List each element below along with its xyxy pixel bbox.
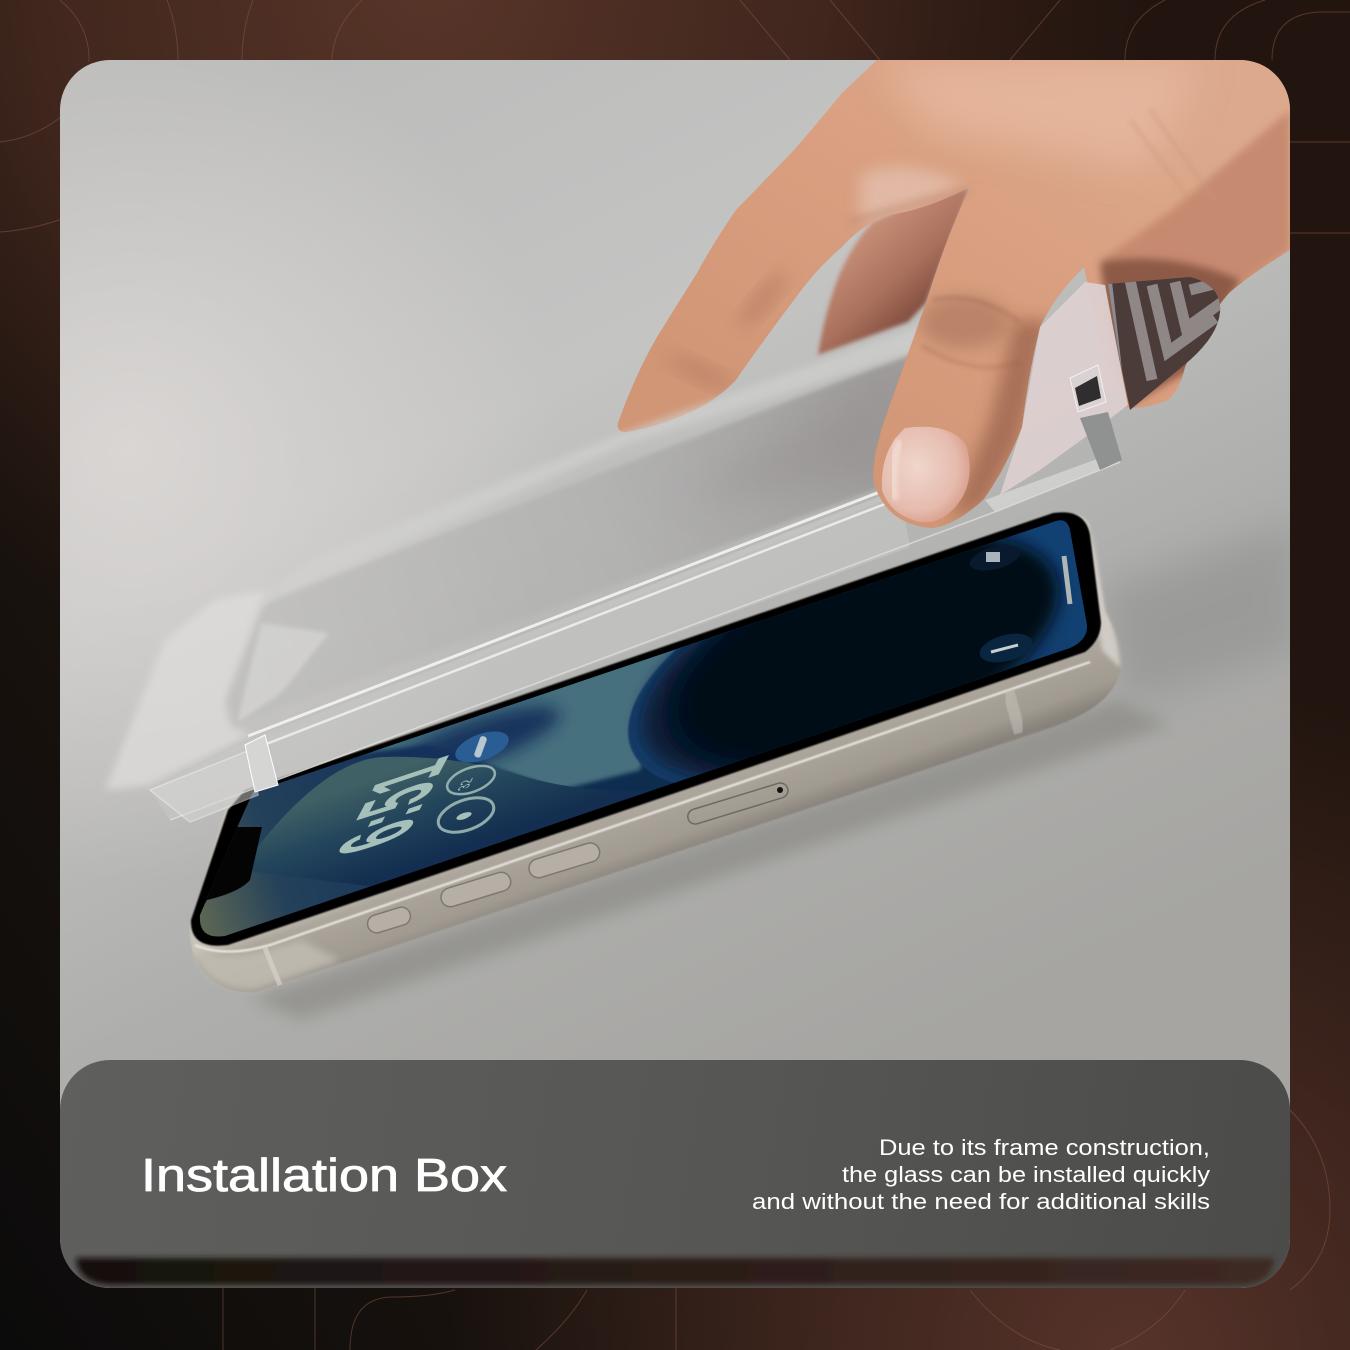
heading: Installation Box: [141, 1149, 507, 1201]
phone: [190, 486, 1120, 992]
description text: [752, 1135, 1210, 1214]
right clip: [1080, 412, 1122, 470]
caption panel: [60, 1060, 1290, 1288]
widget ring top: 32: [454, 776, 478, 793]
left lower corner: [150, 750, 258, 822]
inner triangle tab: [237, 623, 329, 723]
blue shade near pill: [396, 698, 566, 767]
back middle finger: [818, 187, 970, 355]
dark ellipse: [627, 543, 1020, 784]
notch: [204, 827, 262, 904]
metal left highlight: [195, 940, 340, 990]
metal highlight: [195, 662, 1090, 952]
back rail: [454, 323, 919, 514]
glass pane: [238, 354, 908, 680]
light glow: [60, 105, 409, 756]
description text: Due to its frame construction,: [879, 1135, 1210, 1160]
right block: [1000, 282, 1128, 495]
frame lower face: [242, 501, 910, 793]
hand: [618, 60, 1290, 528]
widget ring bottom: [436, 796, 496, 834]
camera button: [970, 546, 1020, 570]
left clip: [245, 735, 278, 792]
description text: the glass can be installed quickly: [842, 1162, 1210, 1187]
left tab: [105, 590, 265, 790]
panel dark strip: [76, 1258, 1274, 1285]
widget ring top: [446, 764, 496, 796]
phone metal body: [190, 512, 1120, 992]
clock: 6:51: [313, 746, 472, 868]
panel surface: [60, 1060, 1290, 1288]
front rail: [248, 490, 885, 736]
phone shadow: [250, 700, 1170, 1020]
lower edge: [170, 462, 1120, 820]
phone right edge: [1094, 545, 1122, 668]
flashlight button: [980, 634, 1032, 662]
table shadow right: [1106, 530, 1290, 696]
installation frame: [105, 282, 1128, 822]
right window: [1070, 365, 1106, 412]
SIM hole: [777, 787, 783, 793]
right glass corner: [985, 455, 1120, 512]
phone bezel: [191, 512, 1101, 946]
phone screen: [200, 520, 1088, 936]
description text: and without the need for additional skills: [752, 1189, 1210, 1214]
wave: [240, 757, 660, 890]
phone buttons: [365, 781, 790, 935]
printed sticker: [1100, 270, 1230, 420]
widget pill: [455, 732, 509, 762]
thumb: [618, 60, 1290, 528]
home indicator: [1064, 556, 1070, 604]
teal lobe: [358, 622, 777, 790]
thumbnail: [882, 427, 970, 522]
